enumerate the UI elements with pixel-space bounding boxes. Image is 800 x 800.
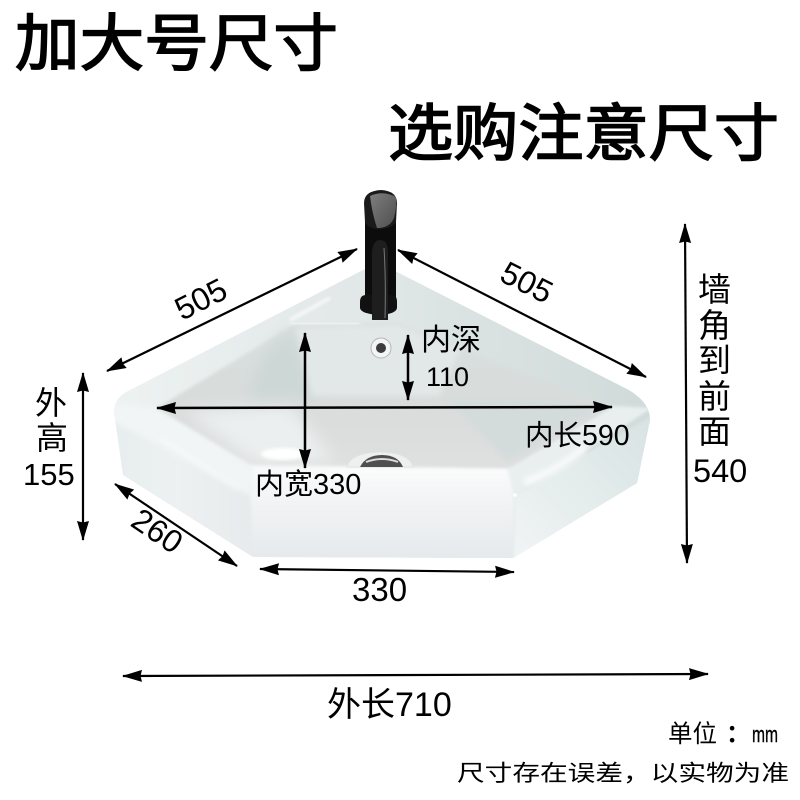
- label: inner depth: 内深: [421, 324, 481, 357]
- label: inner length 590: 内长590: [525, 420, 630, 452]
- left outer face: [105, 415, 255, 565]
- label: 505 right: 505: [495, 254, 559, 310]
- bowl left light wall: [197, 406, 326, 462]
- right outer face: [513, 420, 650, 558]
- label: 110: 110: [426, 362, 469, 392]
- right lip highlight: [525, 448, 585, 482]
- arrow: left top edge: [107, 249, 357, 371]
- arrow: inner width: [304, 333, 306, 468]
- arrow: outer length: [123, 674, 708, 676]
- bowl: [159, 327, 443, 464]
- left lip: [201, 440, 249, 491]
- faucet: [360, 190, 397, 320]
- label: outer height: [23, 385, 75, 492]
- label: wall corner to front 540: 面: [698, 413, 731, 450]
- overflow hole: [371, 338, 391, 358]
- label: wall corner to front 540: 墙: [698, 271, 731, 308]
- arrow: short side 260: [115, 484, 237, 566]
- right lip: [507, 406, 652, 496]
- note: unit: mm: [752, 722, 778, 747]
- label: wall corner to front 540: 角: [698, 307, 731, 344]
- bowl back wall: [299, 329, 456, 395]
- label: outer height: 高: [36, 420, 68, 456]
- arrow: inner length: [157, 407, 612, 408]
- arrow: right top edge: [398, 250, 646, 377]
- bowl left back shading: [258, 342, 304, 399]
- note: unit: [668, 720, 778, 748]
- heading: purchase size note: 选购注意尺寸: [388, 100, 779, 169]
- rim highlight 2: [290, 298, 330, 320]
- label: outer height: 外: [35, 385, 67, 421]
- label: inner width 330: 内宽330: [255, 468, 361, 501]
- label: outer height: 155: [23, 457, 75, 492]
- lower bowl highlight: [261, 448, 305, 460]
- illustration: corner basin: [100, 190, 660, 565]
- label: wall corner to front 540: 到: [698, 342, 731, 379]
- rim highlight: [290, 323, 360, 324]
- label: 260: 260: [125, 501, 189, 561]
- drain: [347, 452, 413, 467]
- note: tolerance: 尺寸存在误差，以实物为准: [457, 761, 789, 786]
- label: 330: 330: [352, 571, 407, 608]
- rim top: [116, 269, 650, 558]
- arrow: outer height: [82, 373, 84, 540]
- arrow: wall corner to front: [685, 224, 687, 563]
- arrow: front 330: [260, 569, 514, 572]
- front lip: [250, 465, 515, 565]
- small gloss spot: [513, 493, 517, 497]
- note: unit: ：: [726, 721, 750, 748]
- label: wall corner to front 540: 540: [693, 453, 747, 489]
- note: unit: 单位: [668, 720, 717, 748]
- label: outer length 710: 外长710: [327, 686, 452, 724]
- label: wall corner to front 540: [693, 271, 747, 489]
- arrow: inner depth: [407, 335, 409, 400]
- left lip shine: [160, 438, 240, 490]
- basin body: [114, 269, 650, 558]
- title: large size: 加大号尺寸: [15, 10, 338, 79]
- bowl right wall: [496, 444, 528, 457]
- label: 505 left: 505: [169, 271, 233, 327]
- label: wall corner to front 540: 前: [698, 378, 731, 415]
